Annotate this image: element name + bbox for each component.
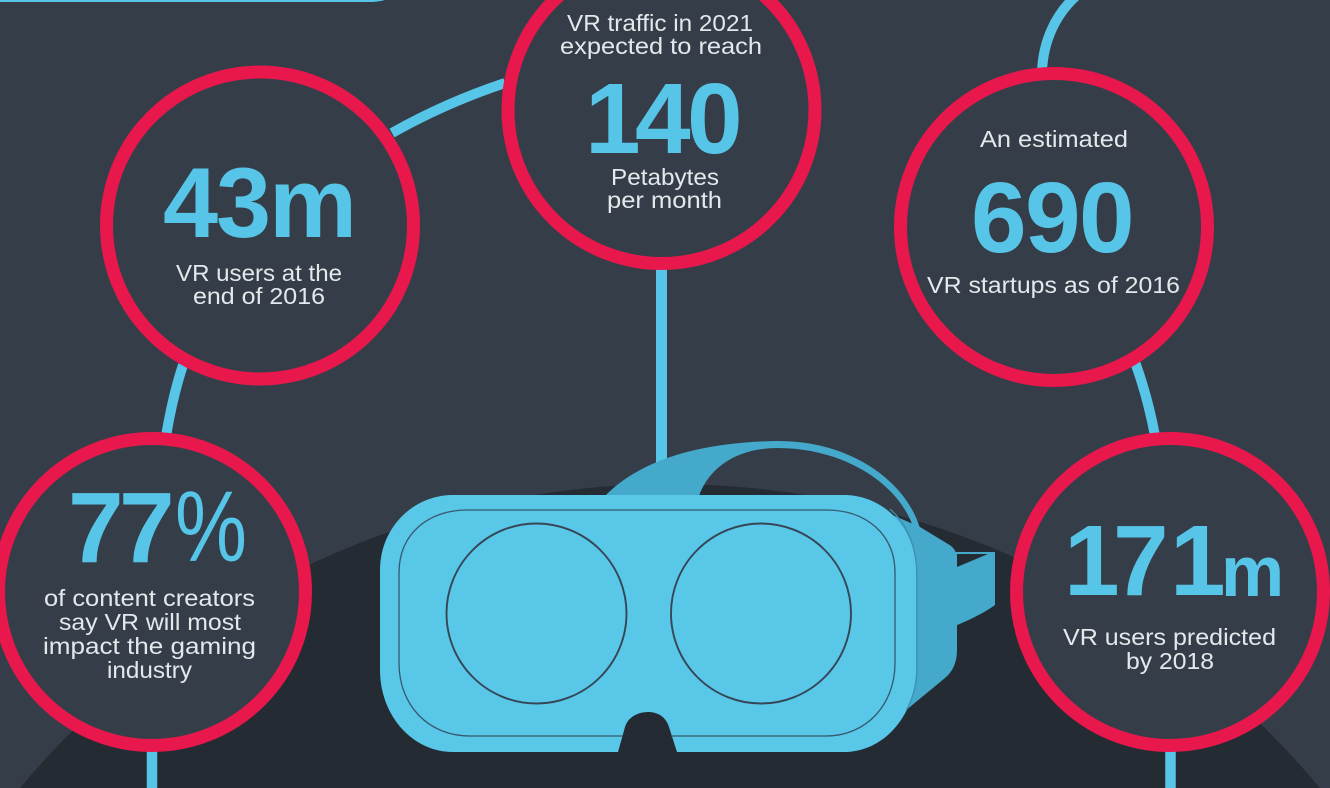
number: 77%: 77 <box>68 472 175 584</box>
caption: VR traffic in 2021 expected to reach: expected to reach <box>560 33 762 59</box>
caption: VR users at the end of 2016: VR users at the <box>176 260 342 286</box>
stat circle: 690 startups <box>900 74 1208 380</box>
caption: Petabytes per month <box>607 164 722 213</box>
caption: VR users at the end of 2016: end of 2016 <box>193 283 325 309</box>
caption: An estimated: An estimated <box>980 126 1128 152</box>
number: 77% <box>68 471 247 584</box>
stat circle: 171m users <box>1016 438 1324 746</box>
headset side body <box>888 513 957 711</box>
caption: VR users predicted by 2018: by 2018 <box>1126 648 1214 674</box>
caption: of content creators say VR will most impact the gaming industry: impact the gaming <box>43 633 256 659</box>
caption: Petabytes per month: per month <box>607 187 722 213</box>
connector lines <box>152 0 1170 788</box>
caption: VR users at the end of 2016 <box>176 260 342 309</box>
caption: of content creators say VR will most impact the gaming industry: say VR will most <box>59 609 242 635</box>
icon: VR headset <box>380 441 995 752</box>
headset inner outline <box>399 510 895 736</box>
caption: VR traffic in 2021 expected to reach: VR traffic in 2021 <box>567 10 753 36</box>
headset front body <box>380 495 916 752</box>
number: 171m: m <box>1221 533 1284 612</box>
headset top strap <box>605 441 920 528</box>
caption: VR traffic in 2021 expected to reach <box>560 10 762 59</box>
caption: VR users predicted by 2018: VR users predicted <box>1063 624 1276 650</box>
headset front edge line <box>890 509 917 711</box>
caption: VR startups as of 2016: VR startups as of 2016 <box>927 272 1180 298</box>
caption: of content creators say VR will most impact the gaming industry: of content creators <box>44 585 255 611</box>
number: 77%: % <box>175 471 247 583</box>
headset side strap <box>950 552 995 628</box>
number: 690: 690 <box>971 162 1135 274</box>
top-left cyan panel edge <box>0 0 385 2</box>
right lens <box>671 524 851 704</box>
caption: of content creators say VR will most impact the gaming industry: industry <box>107 657 193 683</box>
left lens <box>446 524 626 704</box>
stat circle: 43m users <box>106 72 414 379</box>
dark background dome <box>20 484 1320 788</box>
caption: Petabytes per month: Petabytes <box>611 164 719 190</box>
stat circle: 140 petabytes <box>508 0 815 264</box>
number: 43m: 43m <box>163 147 357 258</box>
caption: VR users predicted by 2018 <box>1063 624 1276 674</box>
caption: of content creators say VR will most impact the gaming industry <box>43 585 256 683</box>
stat circle: 77% content creators <box>0 438 306 746</box>
number: 140: 140 <box>585 63 743 175</box>
number: 171m: 171 <box>1064 505 1226 617</box>
